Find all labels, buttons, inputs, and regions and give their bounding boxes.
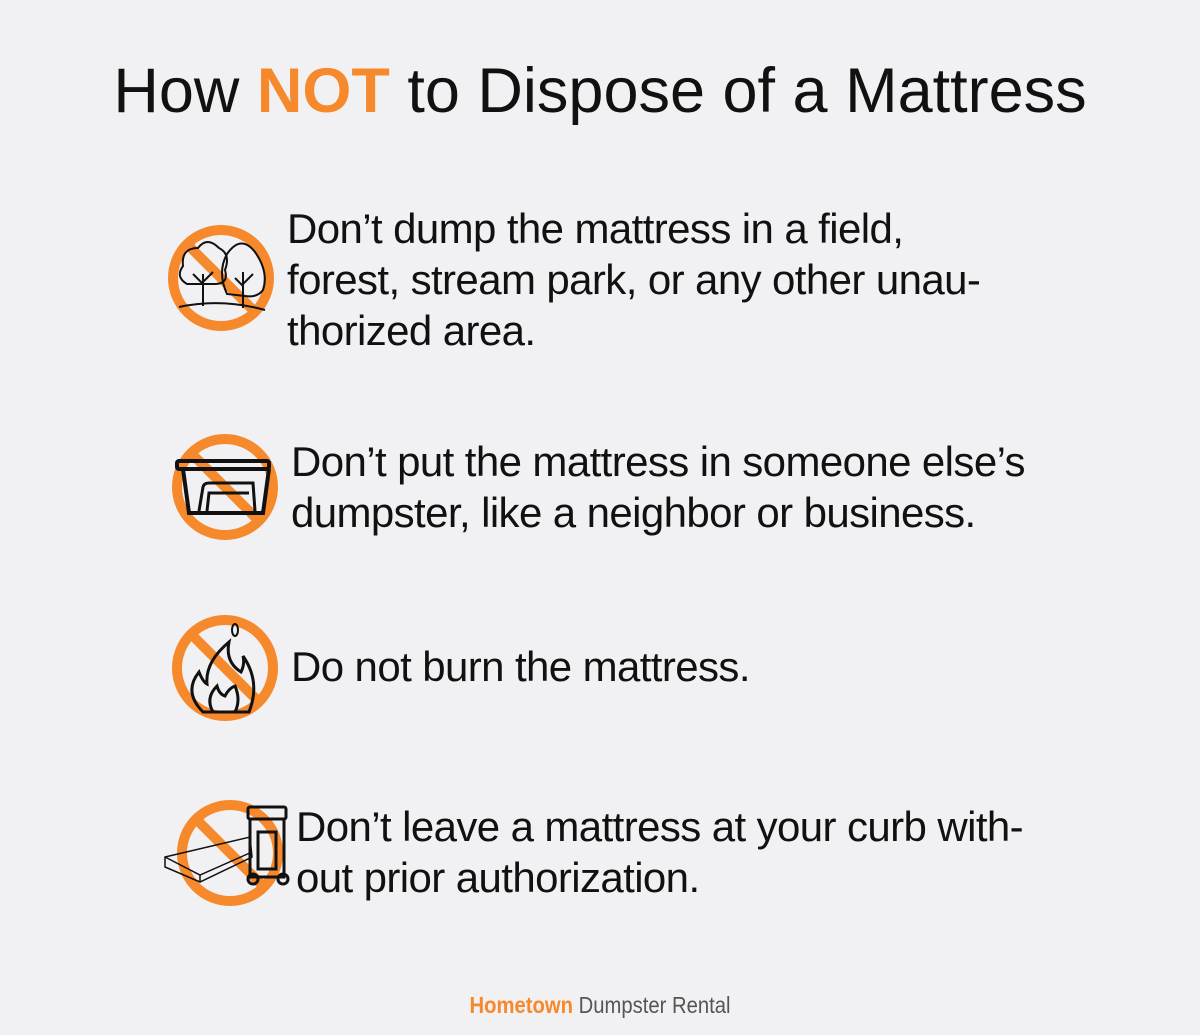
text 2: dumpster, like a neighbor or business. bbox=[291, 489, 976, 536]
text 2: Don’t put the mattress in someone else’s bbox=[291, 438, 1025, 485]
text 3: Do not burn the mattress. bbox=[291, 643, 750, 690]
text 4 bbox=[296, 803, 1023, 901]
text 2 bbox=[291, 438, 1025, 536]
text 4: Don’t leave a mattress at your curb with- bbox=[296, 803, 1023, 850]
icon: no trees bbox=[168, 225, 274, 331]
text 1: thorized area. bbox=[287, 307, 535, 354]
icon: no dumpster bbox=[172, 434, 278, 540]
footer logo: Hometown Dumpster Rental bbox=[470, 992, 730, 1018]
icon: no curb mattress bbox=[164, 800, 290, 906]
text 1: Don’t dump the mattress in a field, bbox=[287, 205, 903, 252]
text 1 bbox=[287, 205, 980, 354]
title: How NOT to Dispose of a Mattress bbox=[113, 56, 1087, 126]
text 1: forest, stream park, or any other unau- bbox=[287, 256, 980, 303]
text 4: out prior authorization. bbox=[296, 854, 700, 901]
icon: no fire bbox=[172, 615, 278, 721]
